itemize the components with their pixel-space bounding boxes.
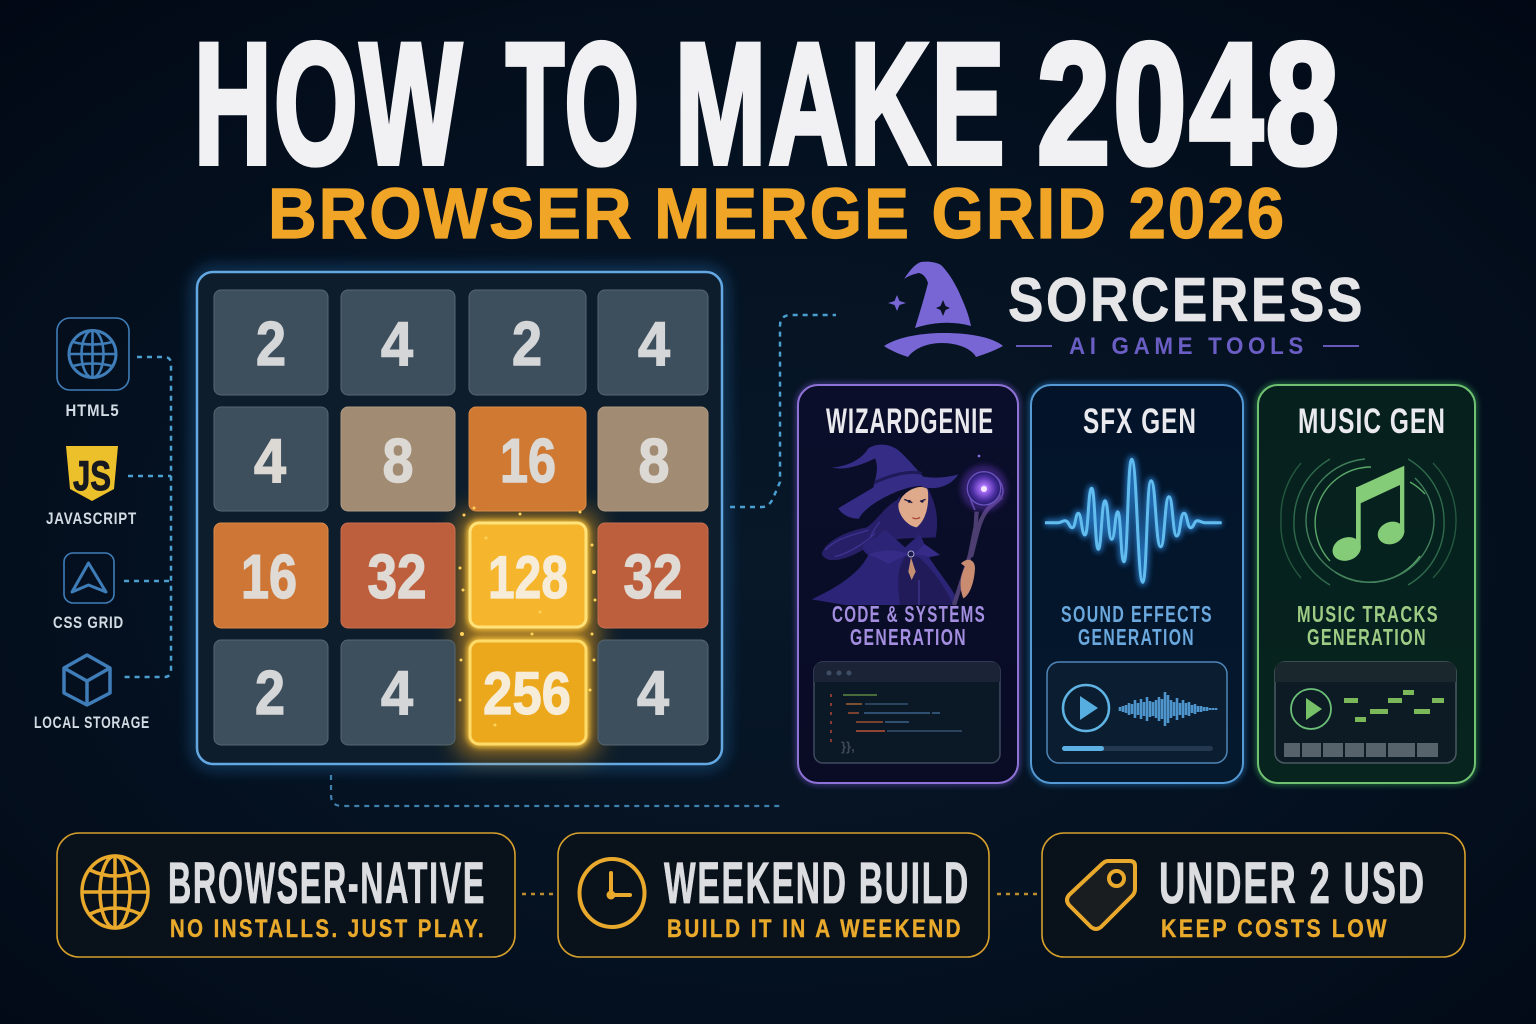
subheading: BUILD IT IN A WEEKEND	[667, 915, 963, 943]
tile row 2	[214, 407, 708, 511]
icon: wizard hat	[884, 262, 1003, 357]
tile row 2: 4	[254, 427, 286, 496]
tile row 3: 32	[624, 543, 682, 612]
tile row 2: 8	[382, 427, 414, 496]
staff	[954, 497, 1002, 605]
heading: WEEKEND BUILD	[664, 851, 970, 916]
panel: WizardGenie	[798, 385, 1018, 783]
panel: Under 2 USD	[1042, 833, 1465, 957]
brand name: SORCERESS	[1008, 266, 1365, 335]
connector: board to footer	[331, 775, 782, 806]
panel: SFX Gen	[1031, 385, 1243, 783]
tile row 1: 2	[256, 310, 286, 379]
title: 2048	[1037, 8, 1342, 200]
tile row 1: 2	[512, 310, 542, 379]
tile row 4: 2	[255, 659, 285, 728]
icon: JavaScript shield: JS	[73, 452, 111, 499]
tile: 128	[470, 523, 586, 627]
sublabel line 2: GENERATION	[1078, 624, 1195, 650]
illustration: witch with staff	[812, 445, 1007, 605]
sublabel line 2: GENERATION	[1307, 624, 1427, 650]
icon: CSS Grid arrow	[64, 553, 114, 603]
audio player mockup	[1047, 662, 1227, 763]
title: MAKE	[675, 8, 1007, 200]
title	[194, 8, 1342, 200]
sublabel: MUSIC TRACKS	[1297, 601, 1439, 627]
tile row 1: 4	[638, 310, 670, 379]
label: JavaScript: JAVASCRIPT	[46, 509, 137, 528]
label: CSS Grid: CSS GRID	[53, 613, 124, 632]
panel: Weekend Build	[558, 833, 989, 957]
tile row 2: 16	[500, 427, 556, 496]
label: Local Storage: LOCAL STORAGE	[34, 713, 150, 732]
tile row 4: 4	[381, 659, 413, 728]
sublabel line 2: GENERATION	[850, 624, 967, 650]
subtitle: BROWSER MERGE GRID 2026	[268, 175, 1286, 254]
tech stack column	[34, 318, 171, 732]
merge glow	[458, 512, 597, 756]
title: TO	[506, 8, 641, 200]
tile row 3: 16	[241, 543, 297, 612]
icon: clock	[580, 859, 644, 927]
icon: local storage cube	[64, 655, 110, 705]
sublabel: SOUND EFFECTS	[1061, 601, 1213, 627]
code editor mockup	[814, 662, 1000, 763]
panel: 2048 game board	[197, 272, 722, 764]
tile glow outline	[470, 523, 586, 744]
icon: music note with rings	[1281, 459, 1456, 585]
code editor mockup: }},	[841, 739, 855, 754]
sublabel: CODE & SYSTEMS	[832, 601, 986, 627]
icon: HTML5 globe	[57, 318, 129, 390]
title: HOW	[194, 8, 464, 200]
icon: JavaScript shield	[66, 446, 118, 501]
tile row 4	[214, 640, 708, 745]
face	[898, 487, 928, 527]
tile: 128: 128	[488, 544, 568, 611]
sparkles	[458, 506, 596, 726]
footer connectors	[522, 893, 1041, 895]
icon: globe	[82, 856, 148, 928]
panel: Music Gen	[1258, 385, 1475, 783]
brand tagline: AI GAME TOOLS	[1069, 333, 1308, 360]
logo: Sorceress	[884, 262, 1365, 360]
tile row 3	[214, 523, 708, 628]
hair	[822, 487, 937, 560]
connector: tech stack to board	[123, 357, 171, 677]
cloak	[812, 529, 955, 605]
heading: BROWSER-NATIVE	[168, 851, 486, 916]
icon: sound wave	[1045, 459, 1222, 582]
subheading: KEEP COSTS LOW	[1161, 915, 1389, 943]
tile row 3: 32	[368, 543, 426, 612]
heading: SFX GEN	[1083, 402, 1197, 441]
tile row 1: 4	[381, 310, 413, 379]
subheading: NO INSTALLS. JUST PLAY.	[170, 915, 486, 943]
tile: 256: 256	[483, 660, 571, 727]
tile: 256	[470, 641, 586, 744]
label: HTML5: HTML5	[66, 401, 120, 420]
tile row 4: 4	[637, 659, 669, 728]
heading: WIZARDGENIE	[826, 402, 994, 441]
hand	[961, 560, 975, 598]
tile row 2: 8	[638, 427, 670, 496]
icon: price tag	[1067, 861, 1135, 929]
hat	[832, 445, 958, 519]
tile row 1	[214, 290, 708, 395]
music player mockup	[1275, 662, 1456, 763]
heading: MUSIC GEN	[1298, 402, 1446, 441]
panel: Browser-Native	[57, 833, 515, 957]
connector: board to Sorceress	[730, 315, 836, 507]
